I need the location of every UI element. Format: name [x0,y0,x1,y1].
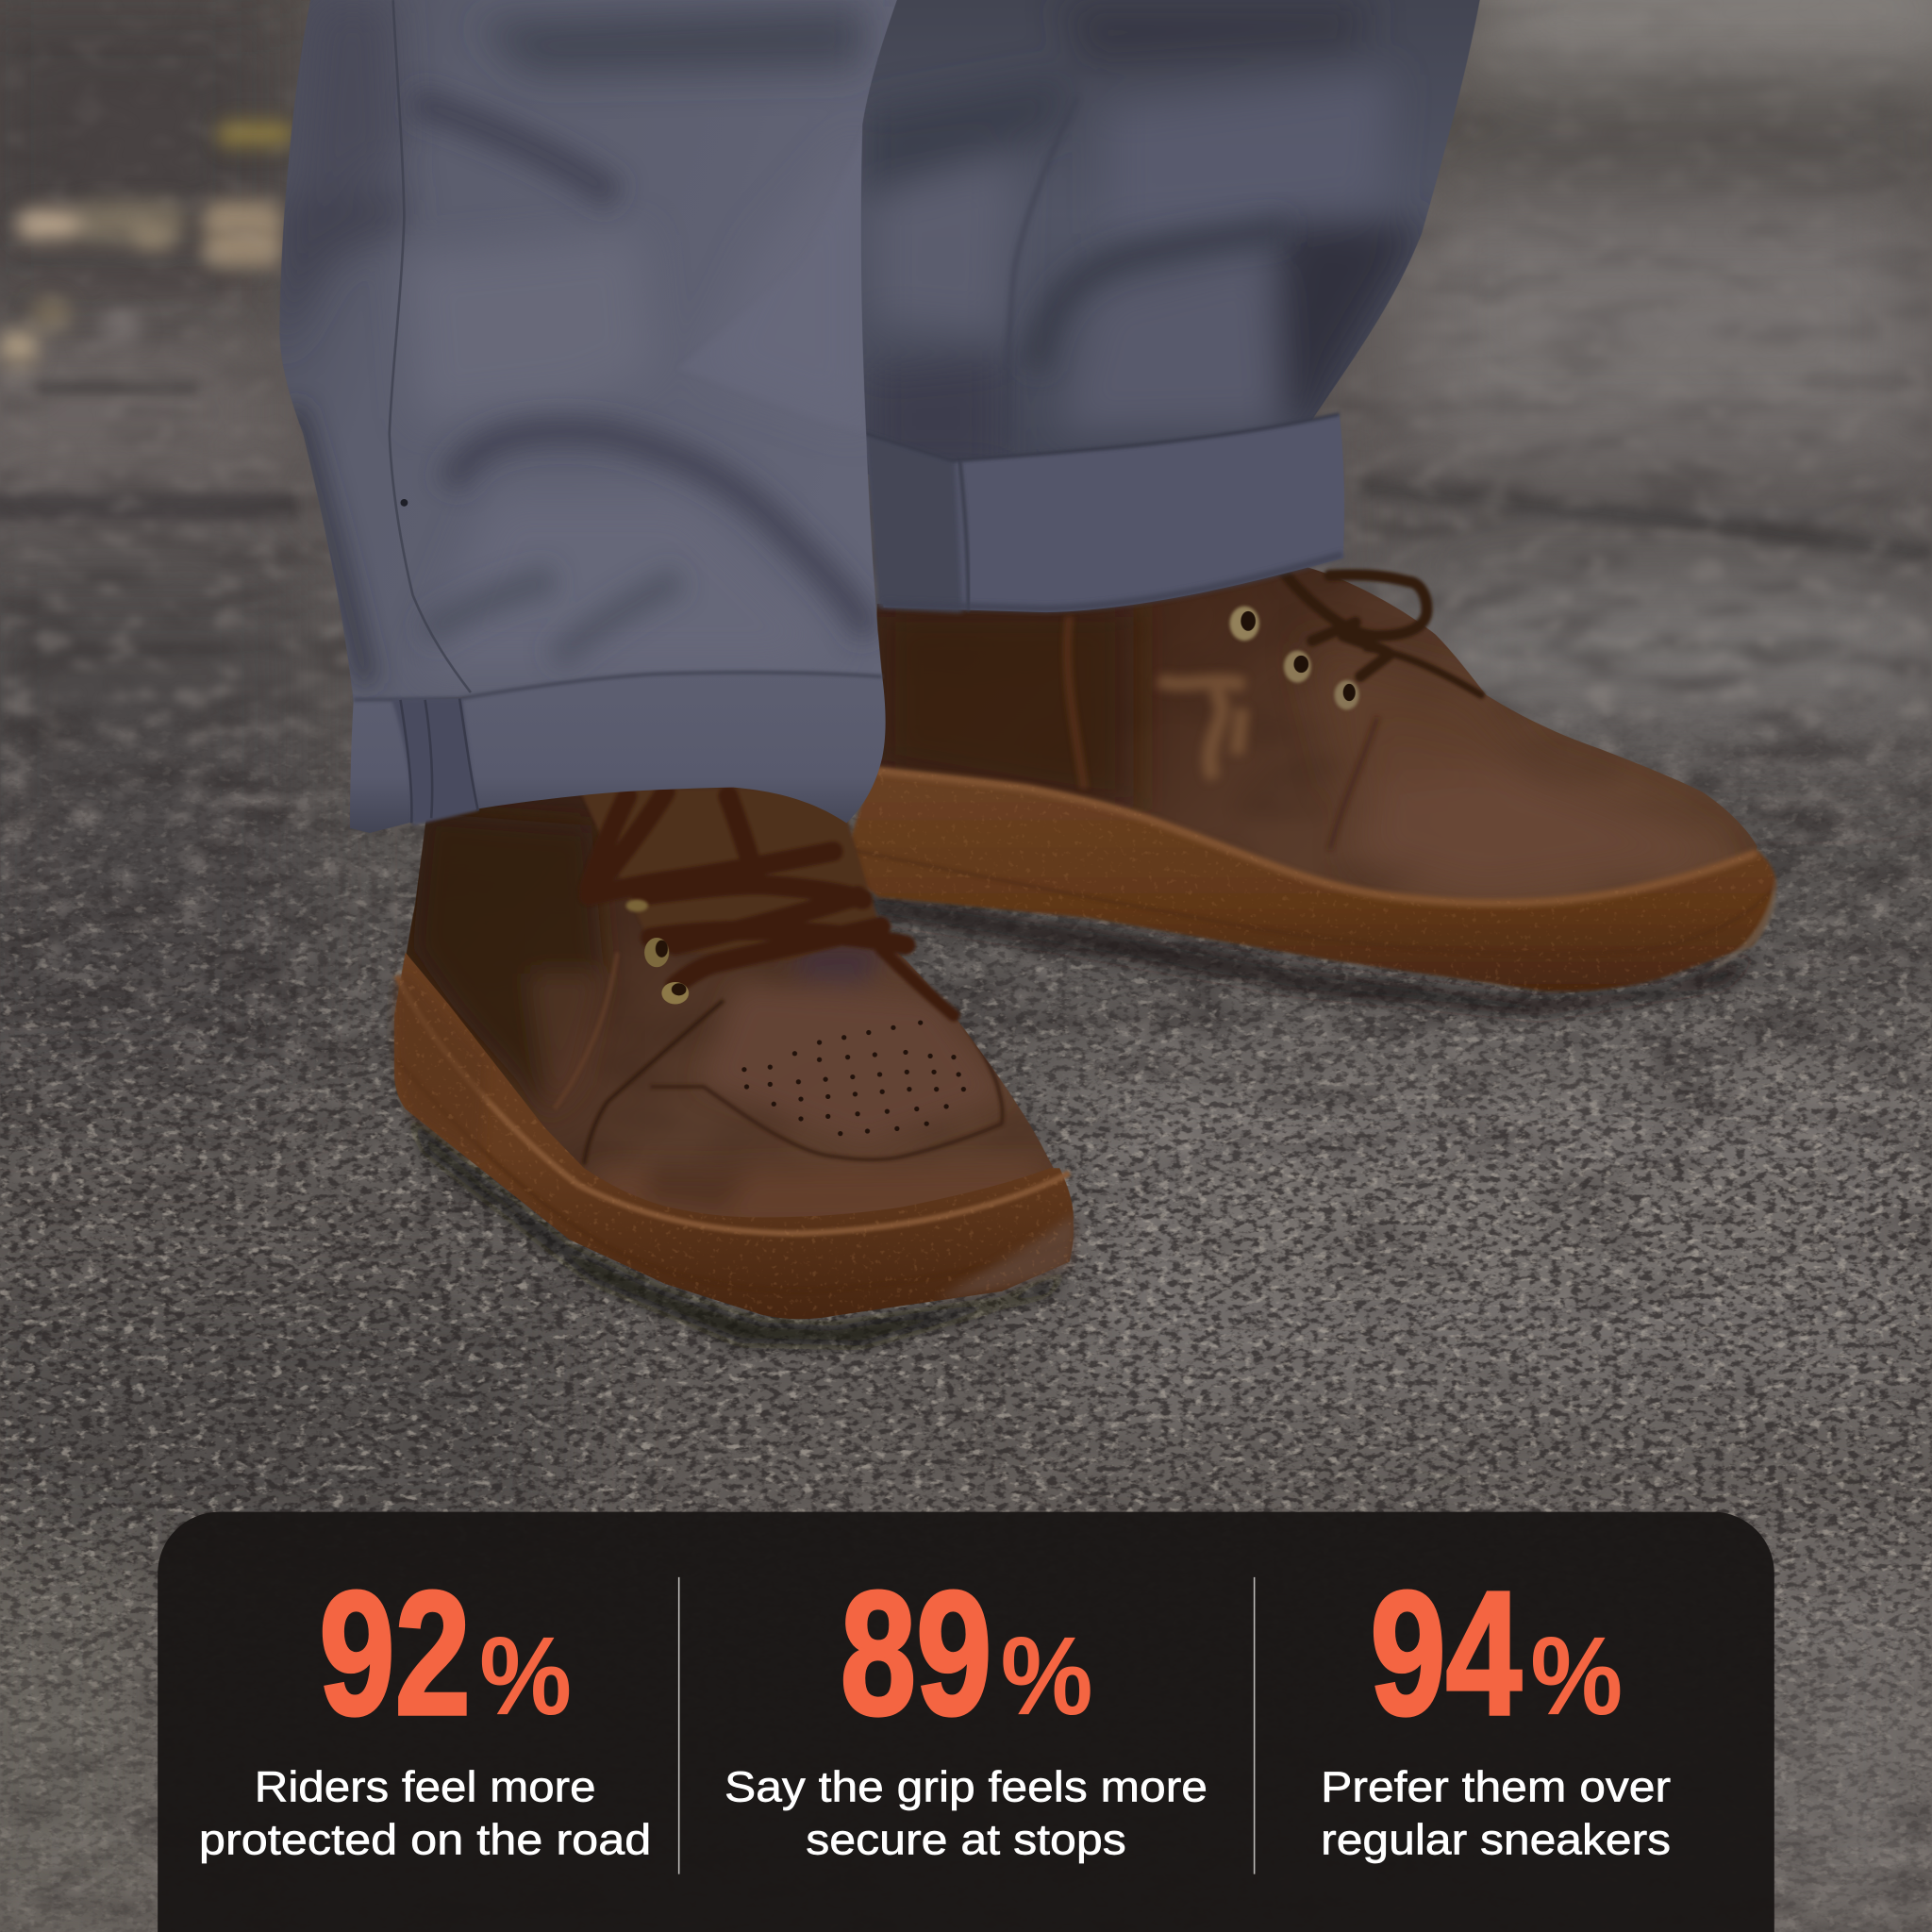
back shoe [838,555,1787,998]
stat: 89%: 89 [841,1555,991,1752]
stat: 92% [199,1555,651,1864]
stat: 92%: protected on the road [199,1816,651,1864]
trousers: right leg [850,0,1480,612]
left trouser cuff [350,673,886,833]
stat: 92%: % [479,1614,572,1738]
front shoe [388,776,1084,1324]
stat: 94%: % [1530,1614,1623,1738]
stat: 89%: % [1001,1614,1093,1738]
stat: 89%: Say the grip feels more [724,1763,1208,1811]
back shoe laces [1281,569,1481,695]
stat: 89%: secure at stops [806,1816,1126,1864]
stats panel [158,1512,1774,1932]
stat: 94% [1321,1555,1671,1864]
stat: 94%: regular sneakers [1321,1816,1671,1864]
divider lines [679,1577,1255,1874]
stat: 94%: 94 [1370,1555,1522,1752]
back shoe sole [849,768,1776,991]
stat: 94%: Prefer them over [1321,1763,1671,1811]
trousers: left leg [277,0,897,833]
stat: 92%: Riders feel more [255,1763,596,1811]
stat: 92%: 92 [319,1555,471,1752]
blurred tan patches, upper left [0,121,293,367]
right trouser cuff [865,414,1344,612]
perforations [741,1020,966,1136]
back shoe eyelets [1230,607,1359,709]
shoe shadows [407,893,1756,1345]
front shoe eyelets [626,899,689,1004]
front sole [394,953,1074,1319]
stat: 89% [724,1555,1208,1864]
front shoe laces [579,789,954,1015]
